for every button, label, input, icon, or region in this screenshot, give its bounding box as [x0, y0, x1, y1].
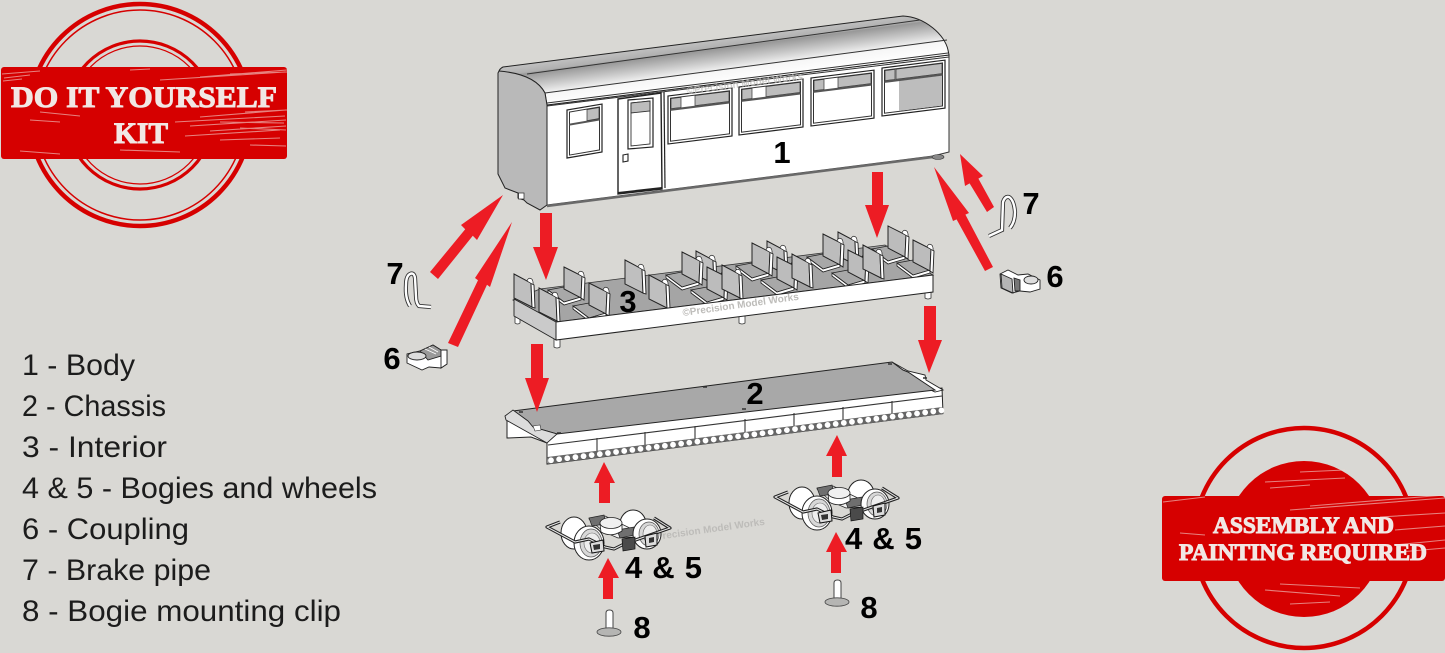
- part numbers: 6: [383, 341, 401, 376]
- deck screws: [519, 364, 927, 433]
- roof: [499, 16, 949, 105]
- coupling: [407, 345, 447, 370]
- web under lip: [507, 420, 547, 443]
- arrow: clip to bogie 2: [826, 532, 847, 573]
- front row seats: [539, 240, 934, 322]
- part numbers: 8: [860, 590, 878, 625]
- end lip: [892, 362, 943, 392]
- interior: [513, 226, 934, 348]
- brake pipe: [406, 274, 431, 307]
- parts list: [22, 349, 377, 628]
- stamp: do it yourself kit: [1, 4, 287, 226]
- part numbers: 7: [386, 256, 404, 291]
- underside shadow: [547, 157, 933, 206]
- mounting clip 2: [825, 580, 849, 606]
- arrow: interior to chassis left: [525, 344, 549, 412]
- arrow: brake pipe right: [960, 154, 994, 212]
- part numbers: [383, 135, 1064, 645]
- bogie 1: ©Precision Model Works: [648, 517, 766, 544]
- parts list: 6 - Coupling: [22, 513, 189, 546]
- scratches: [1163, 470, 1445, 604]
- arrows: [430, 154, 994, 599]
- arrow: body to interior left: [533, 213, 558, 280]
- parts list: 7 - Brake pipe: [22, 554, 211, 587]
- banner scratches: [2, 69, 287, 154]
- saloon window 3: [811, 70, 874, 126]
- arrow: clip to bogie 1: [598, 558, 619, 599]
- saloon window 4: [882, 60, 945, 116]
- rear row seats: [514, 226, 909, 308]
- mounting clip 1: [597, 610, 621, 636]
- stamp: assembly and painting required: [1162, 428, 1445, 648]
- stamp banner: [1162, 496, 1445, 581]
- part numbers: 4 & 5: [845, 521, 922, 556]
- arrow: bogie 1 to chassis: [594, 462, 615, 503]
- chassis: [505, 362, 943, 464]
- parts list: 2 - Chassis: [22, 390, 166, 423]
- arrow: coupling left: [448, 222, 512, 347]
- mounting pins: [515, 290, 931, 348]
- panel lines: [548, 396, 942, 453]
- end face: [498, 71, 547, 210]
- coupling and brake pipe, right: [989, 197, 1040, 293]
- parts list: 4 & 5 - Bogies and wheels: [22, 472, 377, 505]
- end window: [567, 104, 602, 158]
- interior watermark: ©Precision Model Works: [682, 292, 800, 319]
- parts list: 8 - Bogie mounting clip: [22, 595, 341, 628]
- parts list: 1 - Body: [22, 349, 135, 382]
- underframe nub: [932, 154, 944, 160]
- arrow: coupling right: [934, 167, 993, 271]
- arrow: body to interior right: [865, 172, 889, 238]
- outer ring and disc: [1194, 428, 1414, 648]
- saloon window 1: [668, 88, 732, 144]
- lip: [505, 410, 557, 443]
- saloon window 2: [739, 79, 803, 135]
- floor: [513, 245, 933, 322]
- door: [618, 92, 665, 194]
- coupling and brake pipe, left: [406, 274, 447, 370]
- part numbers: 7: [1022, 186, 1040, 221]
- coupling: [1000, 270, 1040, 293]
- part numbers: 6: [1046, 259, 1064, 294]
- end notch: [518, 193, 524, 199]
- part numbers: 4 & 5: [625, 550, 702, 585]
- stamp: do it yourself kit: KIT: [114, 117, 168, 150]
- bogie 1: [547, 510, 766, 560]
- brake pipe: [989, 197, 1015, 236]
- tray end: [514, 299, 556, 340]
- coach body: [498, 16, 949, 210]
- lip notch: [533, 425, 541, 431]
- part numbers: 2: [746, 376, 764, 411]
- stamp: assembly and painting required: PAINTING REQUIRED: [1179, 540, 1427, 565]
- arrow: bogie 2 to chassis: [826, 435, 847, 477]
- stamp rings: [29, 4, 251, 226]
- part numbers: 8: [633, 610, 651, 645]
- body watermark: ©Precision Model Works: [686, 72, 804, 97]
- rivet row: [548, 410, 943, 460]
- stamp banner: [1, 67, 287, 159]
- coach side: [547, 55, 949, 205]
- deck: [513, 362, 935, 434]
- arrow: brake pipe left: [430, 195, 503, 279]
- stamp text: DO IT YOURSELF: [11, 81, 277, 114]
- stamp text: ASSEMBLY AND: [1213, 513, 1394, 538]
- arrow: interior to chassis right: [918, 306, 942, 373]
- bogie 2: [775, 480, 898, 530]
- part numbers: 3: [619, 284, 637, 319]
- parts list: 3 - Interior: [22, 431, 167, 464]
- side wall: [547, 388, 943, 464]
- tray front: [556, 275, 933, 340]
- part numbers: 1: [773, 135, 791, 170]
- roof lines: [527, 20, 949, 106]
